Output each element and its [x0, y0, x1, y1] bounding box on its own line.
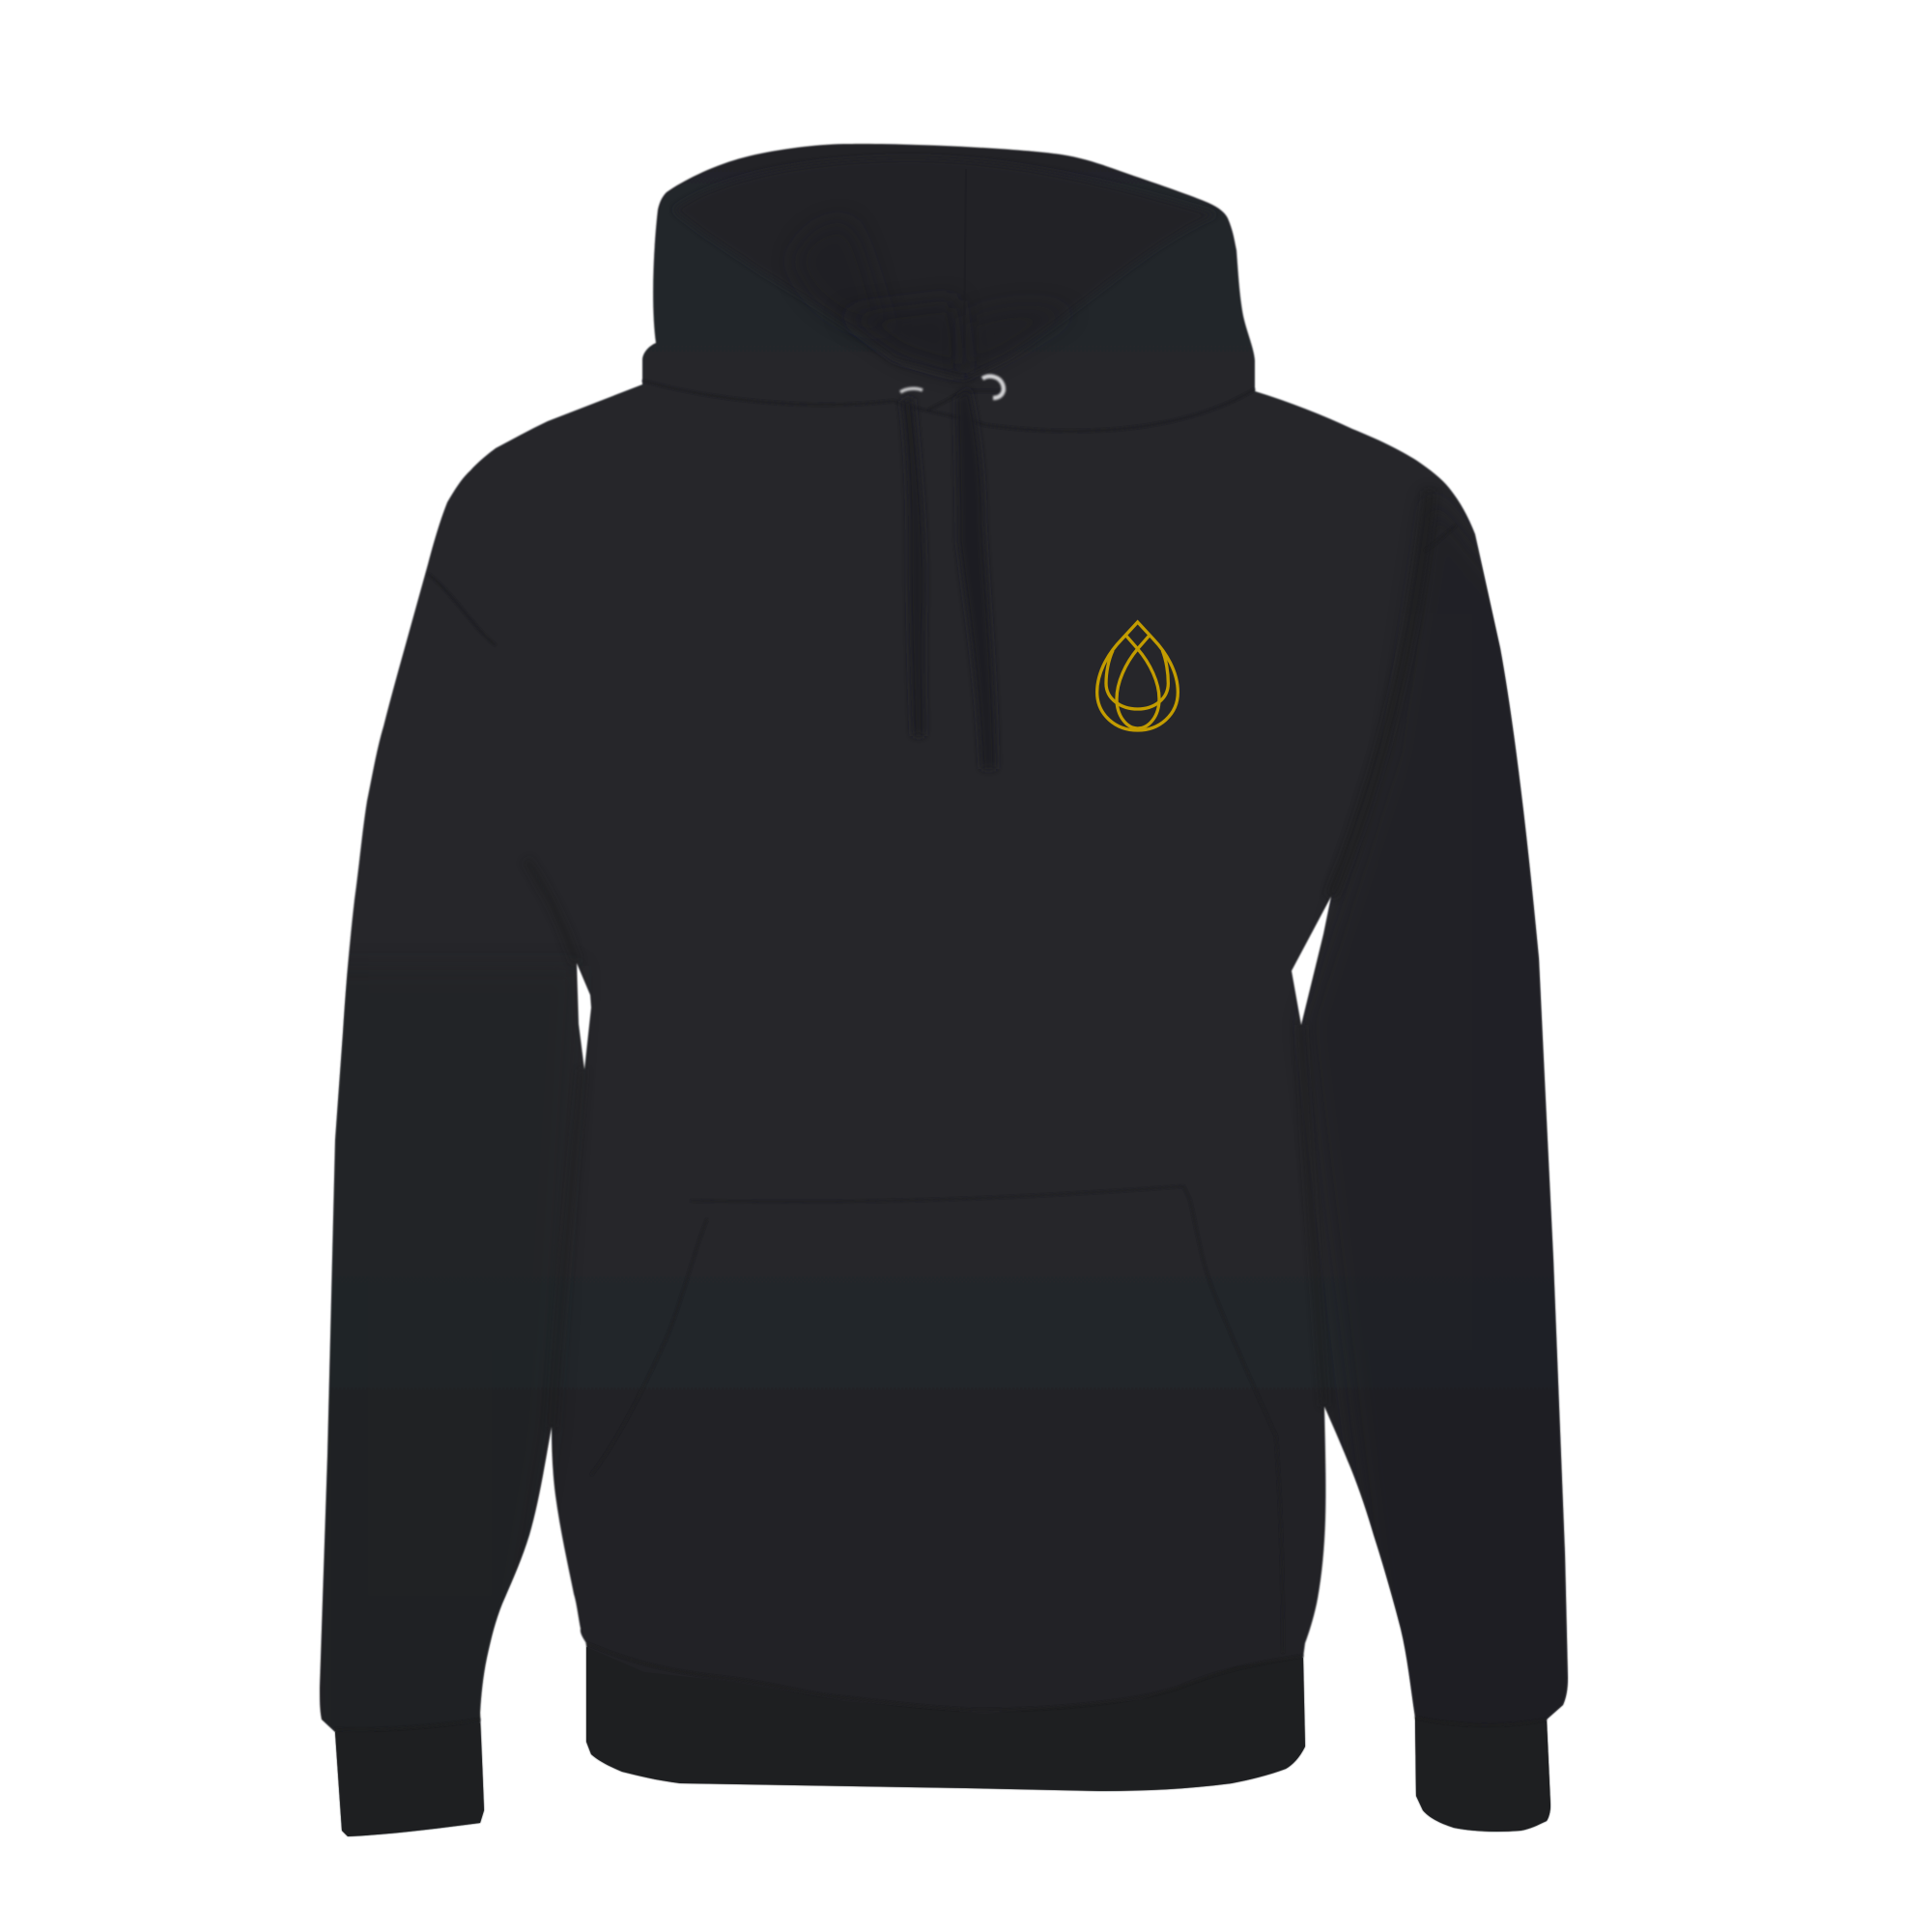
hem seam [335, 1643, 1547, 1730]
logo narrow teardrop with crossing lines [1117, 636, 1159, 728]
right armpit gap [1292, 896, 1331, 1025]
gold teardrop logo [1097, 622, 1178, 730]
hood interior [673, 158, 1217, 379]
logo inner U petal [1106, 650, 1168, 709]
left armpit gap [577, 963, 591, 1069]
right drawstring [956, 388, 996, 769]
kangaroo pocket [591, 1186, 1283, 1653]
logo outer teardrop [1097, 622, 1178, 730]
right grommet [982, 377, 1004, 398]
hoodie silhouette [320, 144, 1568, 1836]
sleeve and ribbing shading [309, 491, 1604, 1840]
hood collar seams [428, 381, 1456, 645]
armpit gaps [577, 896, 1331, 1069]
left drawstring [901, 398, 924, 736]
hoodie product illustration [319, 143, 1569, 1837]
left grommet [900, 388, 923, 392]
